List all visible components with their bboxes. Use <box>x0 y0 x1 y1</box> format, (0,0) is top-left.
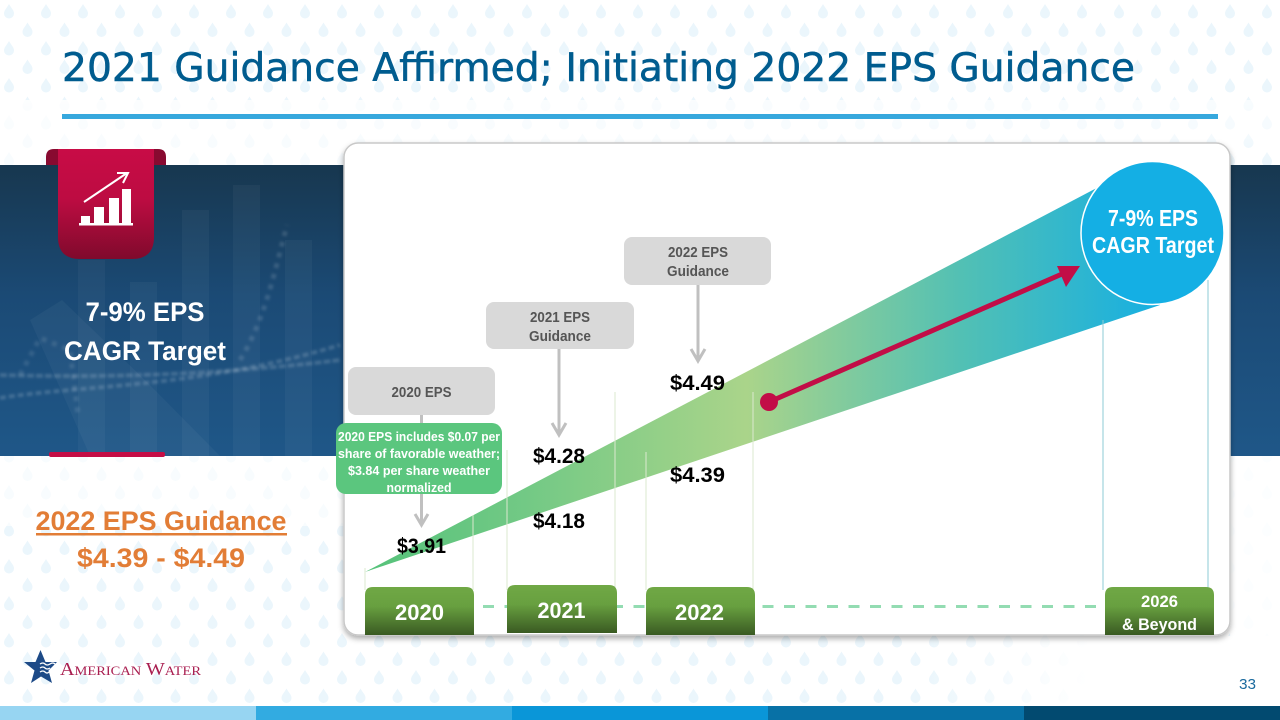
EPS values <box>397 372 725 558</box>
target circle: 7-9% EPS <box>1108 205 1198 231</box>
icon: rising bars and arrow <box>79 173 133 226</box>
left heading: CAGR target <box>64 297 226 366</box>
callout: weather note <box>336 423 502 495</box>
left heading: CAGR target: 7-9% EPS <box>86 297 204 327</box>
target circle <box>1081 162 1224 304</box>
EPS values: $4.18 <box>533 510 585 533</box>
title underline <box>62 114 1218 119</box>
left callout: 2022 EPS guidance: 2022 EPS Guidance <box>36 506 286 536</box>
page number: 33 <box>1239 676 1256 693</box>
title: 2021 Guidance Affirmed; Initiating 2022 EPS Guidance <box>62 46 1135 91</box>
EPS values: $4.39 <box>670 464 725 487</box>
EPS values: $3.91 <box>397 535 446 558</box>
arrow: growth trend <box>760 266 1080 411</box>
dashed timeline <box>483 605 1100 608</box>
year tab: 2026 and beyond <box>1105 587 1214 635</box>
left callout: 2022 EPS guidance <box>36 506 287 573</box>
callout: weather note: $3.84 per share weather <box>348 463 490 478</box>
callout: weather note: normalized <box>386 480 452 495</box>
label: 2021 EPS guidance <box>486 302 634 349</box>
label: 2021 EPS guidance: Guidance <box>529 329 591 345</box>
callout: weather note: 2020 EPS includes $0.07 per <box>338 429 500 444</box>
EPS values: $4.28 <box>533 445 585 468</box>
growth wedge <box>365 181 1160 572</box>
EPS values: $4.49 <box>670 372 725 395</box>
year tab: 2020: 2020 <box>395 600 444 625</box>
label: 2020 EPS <box>348 367 495 415</box>
callout: weather note: share of favorable weather; <box>338 446 500 461</box>
year tab: 2022 <box>646 587 755 635</box>
left heading: CAGR target: CAGR Target <box>64 336 226 366</box>
label: 2022 EPS guidance <box>624 237 771 285</box>
year tab: 2021: 2021 <box>538 598 586 623</box>
left callout: 2022 EPS guidance: $4.39 - $4.49 <box>77 543 245 573</box>
target circle: CAGR Target <box>1092 232 1214 258</box>
accent bar under band <box>49 452 165 457</box>
footer colour bar <box>0 706 1280 720</box>
ribbon badge with growth icon <box>46 149 166 259</box>
year tab: 2020 <box>365 587 474 635</box>
year tab: 2026 and beyond: & Beyond <box>1122 615 1197 634</box>
background band: financial chart photo <box>0 165 1280 456</box>
year guide lines <box>365 280 1208 590</box>
label: 2022 EPS guidance: 2022 EPS <box>668 245 728 261</box>
logo: American Water <box>24 650 201 683</box>
panel: EPS chart <box>336 143 1230 635</box>
label: 2021 EPS guidance: 2021 EPS <box>530 310 590 326</box>
arrows: labels to values <box>415 285 705 525</box>
year tab: 2021 <box>507 585 617 633</box>
year tab: 2022: 2022 <box>675 600 724 625</box>
label: 2020 EPS: 2020 EPS <box>392 385 452 401</box>
year tab: 2026 and beyond: 2026 <box>1141 592 1178 611</box>
label: 2022 EPS guidance: Guidance <box>667 264 729 280</box>
logo: American Water: American Water <box>60 659 201 679</box>
